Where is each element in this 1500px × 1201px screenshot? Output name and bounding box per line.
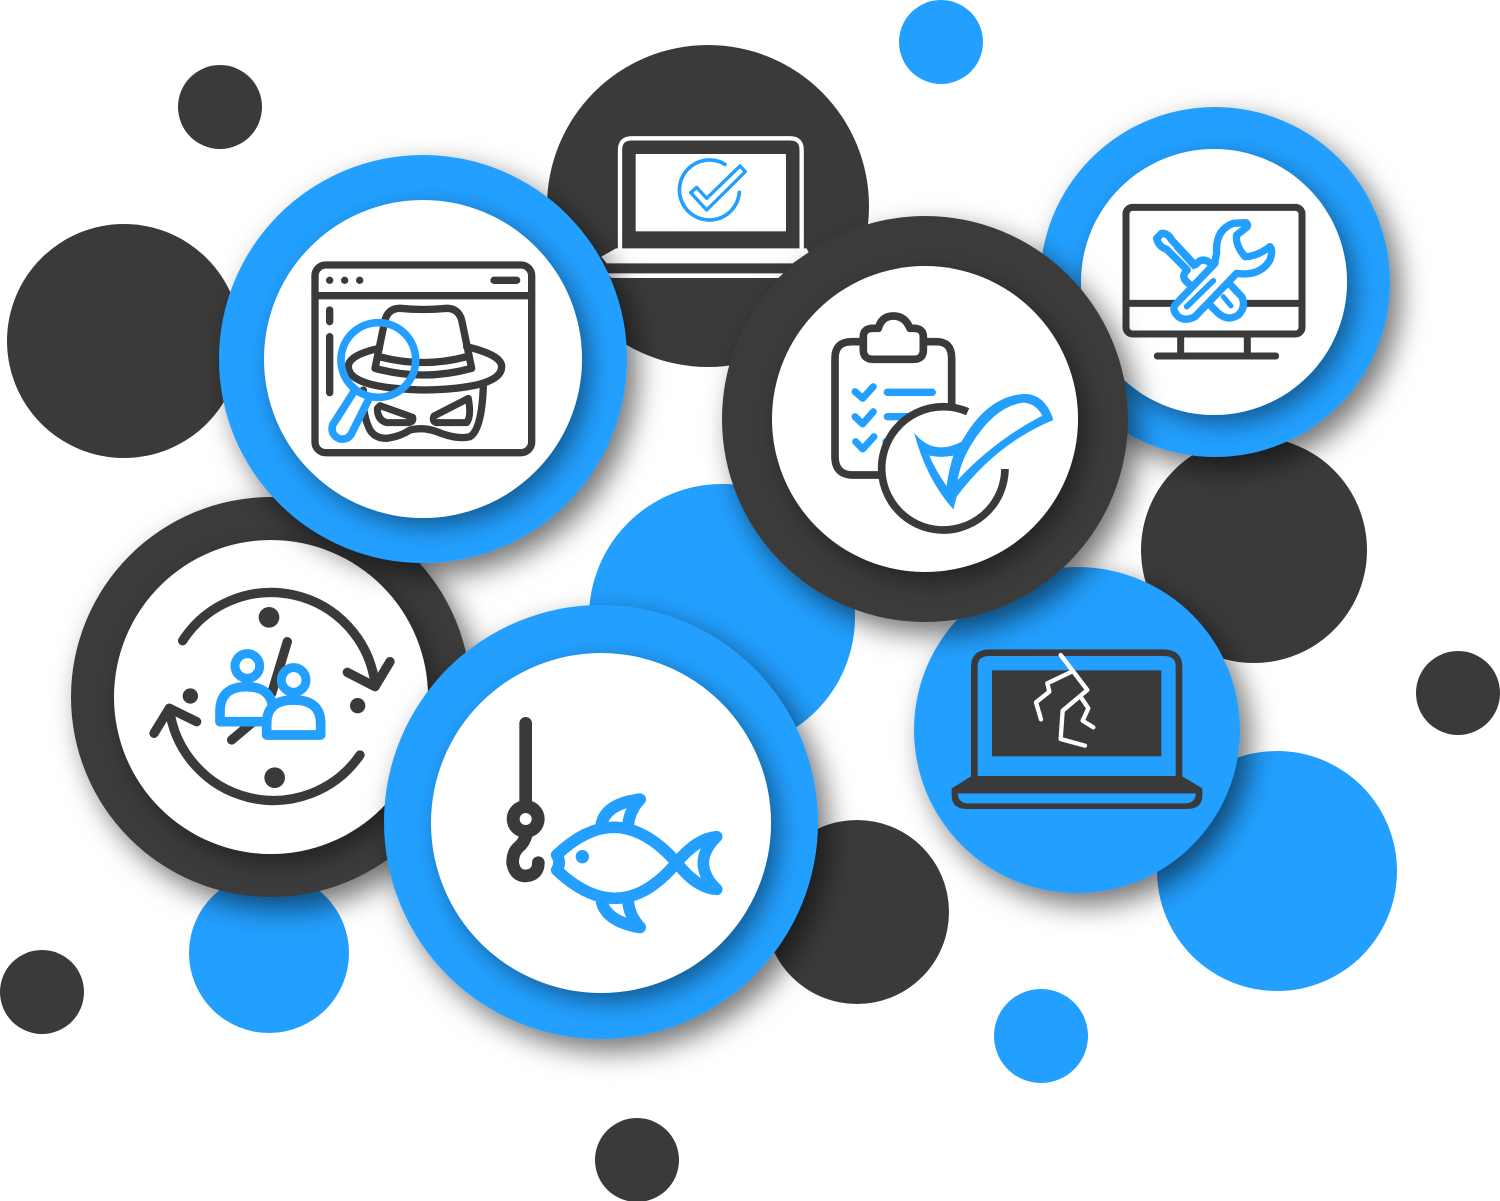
panel: broken laptop (914, 567, 1240, 893)
panel: clock with people (71, 497, 471, 897)
panel: spy in browser (219, 155, 627, 563)
icon: clipboard with large check (835, 316, 1053, 531)
icon: cracked laptop (952, 653, 1202, 809)
large background circles (7, 224, 1397, 1033)
icon: phishing hook and fish (507, 723, 717, 927)
icon: monitor with wrench and screwdriver (1126, 207, 1302, 356)
icon: laptop check (601, 138, 809, 278)
panel: checklist approval (722, 216, 1128, 622)
panel: fish and hook (384, 605, 818, 1039)
panel: laptop with check mark (547, 45, 869, 367)
panel: tools on monitor (1040, 107, 1390, 457)
icon: cycle clock with users (154, 592, 390, 800)
icon: incognito browser with magnifier (315, 265, 532, 453)
